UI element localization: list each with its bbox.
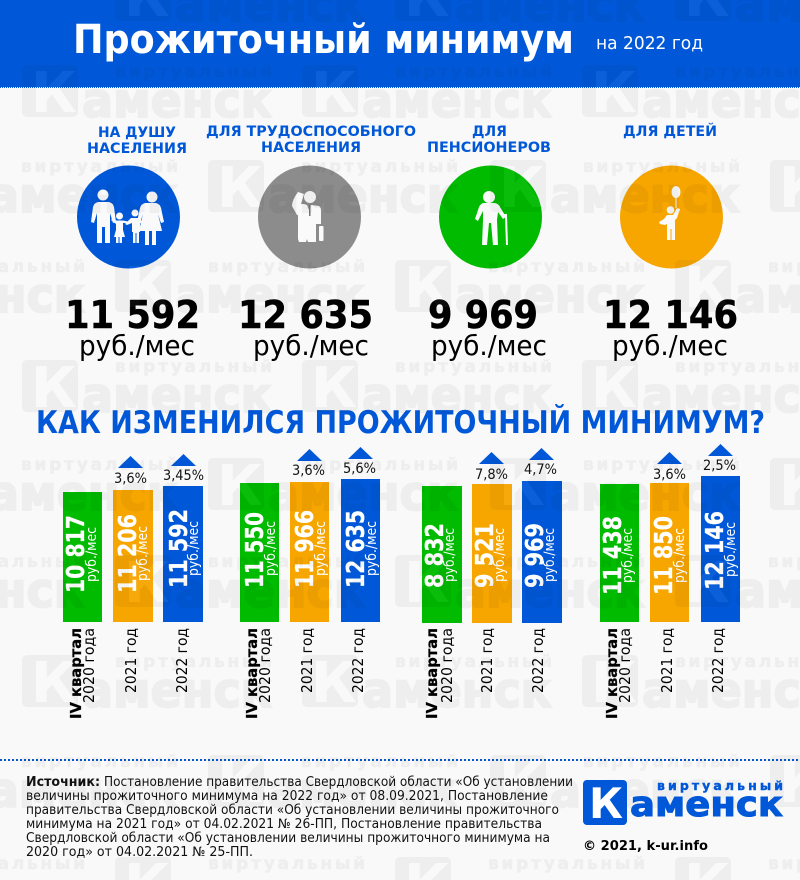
- watermark: К: [31, 61, 77, 126]
- chart: working-age: руб./мес: [263, 521, 279, 576]
- watermark: виртуальный: [115, 357, 272, 377]
- source text: Источник:: [26, 775, 100, 790]
- chart: working-age: 3,6%: [292, 463, 325, 479]
- watermark: виртуальный: [583, 455, 740, 475]
- unit: руб./мес: [612, 329, 728, 362]
- watermark: виртуальный: [208, 552, 365, 572]
- watermark: виртуальный: [21, 157, 178, 177]
- panel: pensioners: [427, 124, 551, 362]
- watermark: аменск: [268, 168, 458, 224]
- source text: 2020 год» от 04.02.2021 № 25-ПП.: [26, 845, 253, 860]
- watermark: виртуальный: [583, 157, 740, 177]
- unit: руб./мес: [253, 329, 369, 362]
- chart: per capita: руб./мес: [84, 527, 100, 582]
- watermark: аменск: [82, 73, 272, 129]
- chart: working-age: IV квартал: [243, 628, 261, 719]
- chart: per capita: 2020 года: [80, 628, 98, 703]
- watermark: аменск: [268, 466, 458, 522]
- watermark: К: [311, 651, 357, 716]
- header band: [0, 0, 800, 88]
- heading: working-age: НАСЕЛЕНИЯ: [261, 140, 361, 156]
- watermark: К: [311, 356, 357, 421]
- chart: pensioners: 4,7%: [524, 462, 557, 478]
- chart: pensioners: 9 521: [470, 523, 499, 588]
- watermark: К: [499, 454, 545, 519]
- source text: Постановление правительства Свердловской области «Об установлении: [104, 775, 573, 790]
- logo: аменск: [630, 785, 783, 825]
- watermark: виртуальный: [488, 854, 645, 874]
- watermark: К: [404, 256, 450, 321]
- watermark: К: [217, 454, 263, 519]
- watermark: К: [404, 551, 450, 616]
- title: Прожиточный минимум: [73, 17, 574, 63]
- chart: children: руб./мес: [723, 522, 739, 577]
- panel: per capita: [65, 125, 200, 362]
- watermark: виртуальный: [21, 455, 178, 475]
- watermark: виртуальный: [301, 157, 458, 177]
- watermark: виртуальный: [21, 752, 178, 772]
- chart: children: 3,6%: [653, 467, 686, 483]
- chart: children: руб./мес: [672, 528, 688, 583]
- watermark: виртуальный: [301, 455, 458, 475]
- chart: working-age: 12 635: [341, 510, 370, 588]
- chart: children: [598, 444, 740, 719]
- watermark: аменск: [550, 466, 740, 522]
- unit: руб./мес: [79, 329, 195, 362]
- icon: family: [77, 166, 180, 268]
- watermark: аменск: [362, 368, 552, 424]
- heading: working-age: ДЛЯ ТРУДОСПОСОБНОГО: [206, 124, 416, 140]
- watermark: виртуальный: [488, 257, 645, 277]
- chart: children: 12 146: [700, 511, 729, 590]
- watermark: виртуальный: [395, 652, 552, 672]
- watermark: аменск: [362, 73, 552, 129]
- watermark: К: [591, 61, 637, 126]
- chart: children: 2,5%: [703, 458, 736, 474]
- chart: per capita: 3,6%: [114, 471, 147, 487]
- value: children: 12 146: [603, 293, 738, 337]
- source text: [26, 775, 573, 860]
- chart: working-age: 2021 год: [298, 628, 316, 693]
- watermark: виртуальный: [115, 652, 272, 672]
- source text: правительства Свердловской области «Об установлении величины прожиточного: [26, 803, 559, 818]
- chart: per capita: [61, 454, 204, 719]
- chart: per capita: 11 592: [164, 509, 193, 588]
- watermark: К: [31, 651, 77, 716]
- watermark: К: [684, 551, 730, 616]
- watermark: аменск: [362, 663, 552, 719]
- chart: per capita: руб./мес: [186, 521, 202, 576]
- watermark: виртуальный: [208, 257, 365, 277]
- source text: минимума на 2021 год» от 04.02.2021 № 26-ПП, Постановление правительства: [26, 817, 542, 832]
- chart: working-age: руб./мес: [313, 521, 329, 576]
- chart: working-age: 5,6%: [343, 461, 376, 477]
- watermark: К: [311, 61, 357, 126]
- chart: children: 2020 года: [616, 628, 634, 703]
- watermark: К: [217, 751, 263, 816]
- watermark: виртуальный: [395, 357, 552, 377]
- heading: working-age: [206, 124, 416, 156]
- chart: children: 11 438: [598, 516, 627, 595]
- heading: pensioners: ДЛЯ: [472, 124, 507, 140]
- watermark: виртуальный: [488, 552, 645, 572]
- watermark: К: [499, 156, 545, 221]
- chart: children: 2021 год: [658, 628, 676, 693]
- source text: величины прожиточного минимума на 2022 год» от 08.09.2021, Постановление: [26, 789, 548, 804]
- logo: виртуальный: [657, 778, 783, 793]
- chart: working-age: 2020 года: [256, 628, 274, 703]
- chart: pensioners: 2022 год: [529, 628, 547, 693]
- chart: pensioners: IV квартал: [423, 628, 441, 719]
- icon: elderly person: [439, 166, 542, 268]
- source text: Свердловской области «Об установлении величины прожиточного минимума на: [26, 831, 550, 846]
- watermark: К: [124, 256, 170, 321]
- watermark: виртуальный: [583, 752, 740, 772]
- watermark: К: [124, 551, 170, 616]
- chart: children: 2022 год: [709, 628, 727, 693]
- heading: per capita: НАСЕЛЕНИЯ: [87, 141, 187, 157]
- chart: pensioners: 9 969: [520, 523, 549, 588]
- chart: pensioners: 2021 год: [478, 628, 496, 693]
- chart: pensioners: руб./мес: [492, 528, 508, 582]
- watermark: К: [217, 156, 263, 221]
- chart: per capita: IV квартал: [67, 628, 85, 719]
- chart: pensioners: 8 832: [420, 523, 449, 588]
- chart: pensioners: руб./мес: [442, 528, 458, 582]
- panel: children: [603, 123, 738, 362]
- value: working-age: 12 635: [238, 293, 373, 337]
- heading: pensioners: ПЕНСИОНЕРОВ: [427, 140, 551, 156]
- watermark: виртуальный: [208, 854, 365, 874]
- chart: working-age: 2022 год: [349, 628, 367, 693]
- heading: per capita: [87, 125, 187, 157]
- heading: children: ДЛЯ ДЕТЕЙ: [623, 123, 717, 140]
- watermark: К: [499, 751, 545, 816]
- chart: per capita: 11 206: [113, 514, 142, 593]
- watermark: виртуальный: [115, 62, 272, 82]
- logo: К: [589, 779, 623, 828]
- watermark: аменск: [175, 563, 365, 619]
- watermark: аменск: [550, 168, 740, 224]
- watermark: К: [31, 356, 77, 421]
- chart: working-age: 11 550: [240, 512, 269, 588]
- logo: [583, 778, 783, 828]
- watermark: аменск: [455, 268, 645, 324]
- chart: children: IV квартал: [603, 628, 621, 719]
- chart: per capita: руб./мес: [135, 526, 151, 581]
- chart: per capita: 10 817: [61, 515, 90, 593]
- watermark: аменск: [455, 563, 645, 619]
- chart: children: руб./мес: [620, 528, 636, 583]
- chart: per capita: 2021 год: [122, 628, 140, 693]
- watermark: виртуальный: [395, 62, 552, 82]
- chart: pensioners: [420, 448, 562, 719]
- chart: working-age: [240, 447, 380, 719]
- watermark: аменск: [550, 763, 740, 819]
- watermark: К: [591, 651, 637, 716]
- icon: child with balloon: [620, 166, 723, 268]
- subtitle: на 2022 год: [596, 33, 703, 54]
- chart: children: 11 850: [649, 516, 678, 595]
- watermark: К: [591, 356, 637, 421]
- chart: pensioners: 2020 года: [438, 628, 456, 703]
- chart: working-age: 11 966: [290, 510, 319, 588]
- panel: working-age: [206, 124, 416, 362]
- watermark: виртуальный: [301, 752, 458, 772]
- watermark: аменск: [175, 268, 365, 324]
- chart: pensioners: руб./мес: [542, 528, 558, 582]
- watermark: К: [684, 256, 730, 321]
- unit: руб./мес: [431, 329, 547, 362]
- icon: businessman: [258, 166, 361, 268]
- chart: working-age: руб./мес: [364, 521, 380, 576]
- heading: per capita: НА ДУШУ: [98, 125, 176, 141]
- watermark: аменск: [268, 763, 458, 819]
- value: per capita: 11 592: [65, 293, 200, 337]
- chart: pensioners: 7,8%: [475, 467, 508, 483]
- chart: per capita: 2022 год: [173, 628, 191, 693]
- copyright: © 2021, k-ur.info: [583, 838, 708, 854]
- value: pensioners: 9 969: [428, 293, 538, 337]
- heading: pensioners: [427, 124, 551, 156]
- chart: per capita: 3,45%: [163, 468, 204, 484]
- watermark: аменск: [82, 368, 272, 424]
- watermark: аменск: [82, 663, 272, 719]
